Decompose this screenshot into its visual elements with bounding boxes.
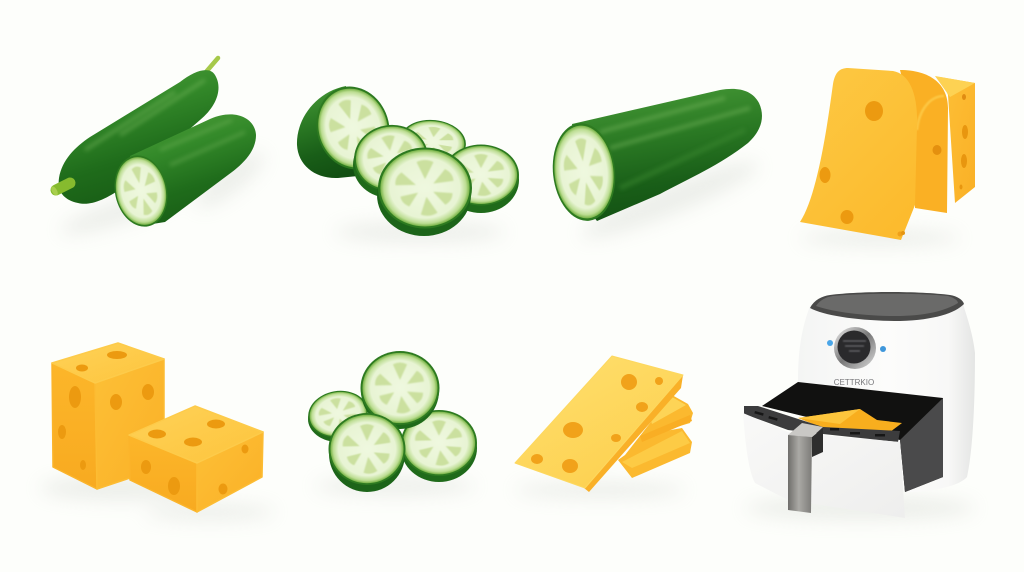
illustration: four cucumber slices: [304, 351, 477, 492]
top wedge face: [515, 356, 683, 492]
front slice: [328, 413, 406, 492]
illustration: two cucumbers, one cut: [50, 58, 256, 232]
illustration: white air fryer with open basket: [743, 292, 975, 518]
illustration: two cheese cubes with holes: [52, 343, 263, 512]
rear cheese block: [935, 76, 975, 203]
lid: [810, 292, 964, 321]
drawer handle: [788, 423, 823, 513]
low cube: [129, 406, 263, 512]
right slice: [401, 410, 477, 482]
brand label: CETTRKIO: [834, 378, 874, 387]
front face of folded slice: [800, 68, 917, 240]
illustration: folded cheese slice and block: [800, 68, 975, 240]
illustration: cheese wedge on stacked slices: [515, 356, 693, 492]
basket interior and side: [762, 382, 943, 492]
middle slice: [350, 120, 432, 198]
soft ground shadows: [40, 145, 975, 520]
illustration: half cucumber with slices: [297, 77, 519, 236]
control dial with indicator lights: [827, 327, 886, 369]
back cucumber with stems: [50, 58, 219, 204]
front slice: [377, 148, 472, 236]
top slice: [360, 351, 440, 429]
fryer body: [798, 304, 975, 492]
front cucumber with cut face: [108, 114, 256, 232]
fold back: [900, 70, 948, 213]
drawer rim with vents: [744, 406, 900, 442]
food in basket: [798, 409, 902, 432]
drawer front: [743, 413, 905, 518]
back slice: [398, 117, 468, 167]
cucumber half: [297, 77, 400, 179]
right slice: [443, 144, 519, 213]
tall cube: [52, 343, 164, 489]
left slice: [304, 386, 372, 442]
stacked slabs: [618, 395, 693, 478]
illustration: large cut cucumber: [548, 89, 762, 224]
